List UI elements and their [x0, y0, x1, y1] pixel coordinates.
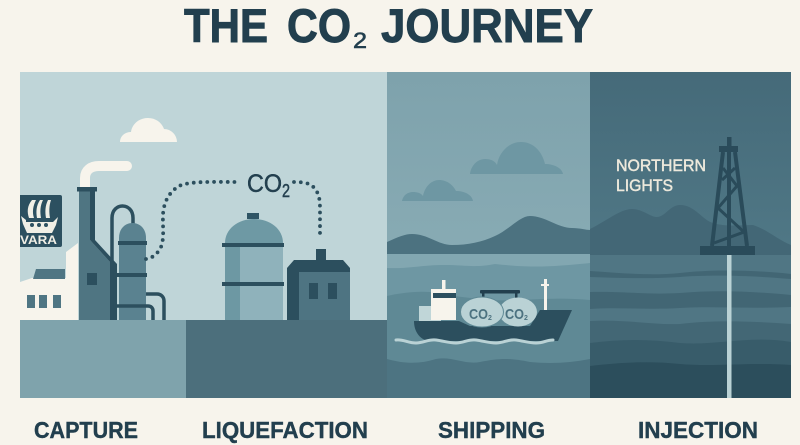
icon: large cloud [470, 142, 563, 174]
icon: storage tank [222, 213, 284, 320]
icon: ship: 2 [488, 315, 492, 322]
mountains [387, 216, 590, 255]
icon: capture plant [77, 187, 164, 320]
arrow: dotted path to liquefaction [294, 182, 320, 239]
title: 2 [353, 28, 367, 53]
step labels: CAPTURE [34, 417, 138, 443]
icon: wave [396, 340, 553, 343]
icon: smoke [85, 166, 127, 188]
panel: shipping [387, 72, 590, 398]
hills [590, 205, 791, 255]
panel: injection [590, 72, 791, 398]
step labels: LIQUEFACTION [202, 417, 368, 443]
well pipe [727, 255, 732, 398]
icon: derrick [700, 137, 755, 255]
title: CO [287, 0, 351, 52]
icon: ship: CO [505, 306, 524, 323]
label: Northern Lights: NORTHERN [616, 156, 706, 175]
step labels: SHIPPING [438, 417, 545, 443]
icon: VARA logo: VARA [20, 233, 57, 247]
title: JOURNEY [381, 0, 593, 52]
icon: small cloud [402, 180, 473, 201]
CO2 label: CO [247, 170, 282, 198]
icon: ship: 2 [524, 315, 528, 322]
step labels [34, 417, 758, 443]
water bands [387, 254, 590, 398]
icon: ship: CO [469, 306, 488, 323]
title [184, 0, 593, 53]
arrow: dotted path to CO2 label [146, 182, 240, 259]
label: Northern Lights: LIGHTS [616, 176, 673, 195]
panel: capture and liquefaction [20, 72, 387, 398]
icon: ship [414, 279, 572, 341]
step labels: INJECTION [638, 417, 758, 443]
CO2 label: 2 [282, 181, 290, 201]
label: Northern Lights [616, 156, 706, 195]
rock layers [590, 255, 791, 398]
icon: liquefaction house [287, 249, 350, 320]
title: THE [184, 0, 268, 52]
icon: white building [20, 243, 78, 320]
icon: VARA logo [20, 195, 62, 247]
icon: capture cloud [120, 118, 177, 142]
